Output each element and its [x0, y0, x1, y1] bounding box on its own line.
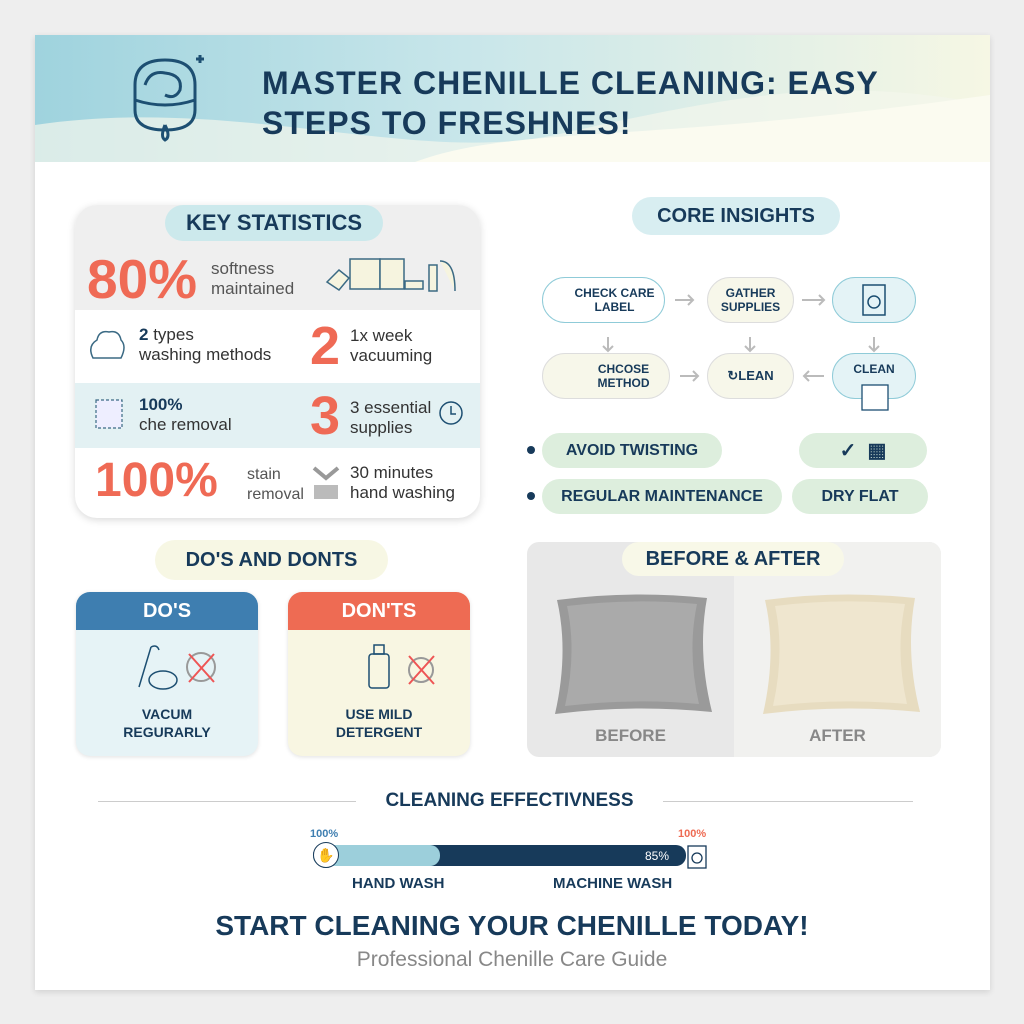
stat 80%: softness [211, 259, 274, 278]
panel: do's: VACUM [142, 706, 192, 722]
stat 30 minutes [312, 463, 455, 502]
stat 2 1x week: 2 [310, 316, 340, 376]
panel: before & after: AFTER [809, 726, 866, 745]
panel: don'ts [288, 592, 470, 756]
stat 3 essential: supplies [350, 418, 412, 437]
heading: cleaning effectiveness: CLEANING EFFECTIVNESS [385, 790, 634, 811]
bar chart: HAND WASH [352, 875, 444, 892]
flowchart: SUPPLIES [721, 300, 780, 314]
header banner [35, 35, 990, 162]
panel: don'ts: DON'TS [342, 600, 416, 622]
stat 2 types [90, 325, 271, 364]
stat 80% [87, 248, 294, 310]
stat 100% chemical: che removal [139, 415, 232, 434]
stat 80%: maintained [211, 279, 294, 298]
bar chart: 100% [310, 828, 338, 840]
stat 80%: 80% [87, 248, 197, 310]
stat 100% stain: 100% [95, 454, 218, 507]
stat 2 1x week: 1x week [350, 326, 412, 345]
footer call to action: START CLEANING YOUR CHENILLE TODAY! [215, 910, 809, 941]
image: before pillow [555, 594, 712, 714]
heading: key statistics [165, 205, 383, 241]
title [262, 65, 879, 141]
heading: core insights: CORE INSIGHTS [657, 204, 815, 226]
bar chart: MACHINE WASH [553, 875, 672, 892]
title: STEPS TO FRESHNES! [262, 105, 631, 141]
stat 2 types: washing methods [139, 345, 271, 364]
heading: key statistics: KEY STATISTICS [186, 210, 362, 235]
stat 30 minutes: 30 minutes [350, 463, 433, 482]
panel: before & after: BEFORE [595, 726, 666, 745]
panel: before & after: BEFORE & AFTER [646, 548, 820, 570]
heading: dos and donts: DO'S AND DONTS [186, 548, 357, 570]
flowchart: METHOD [598, 376, 650, 390]
tips [527, 433, 928, 514]
icon: chenille roll [134, 55, 204, 142]
bar chart: 100% [678, 828, 706, 840]
flowchart: CHECK CARE [574, 286, 654, 300]
stat 3 essential: 3 essential [350, 398, 431, 417]
heading: dos and donts [155, 540, 388, 580]
stat 100% stain: stain [247, 466, 281, 483]
tips: ✓ ▦ [840, 440, 886, 462]
stat 100% chemical: 100% [139, 395, 182, 414]
stat 100% chemical [95, 395, 232, 434]
flowchart: ↻LEAN [727, 368, 774, 383]
tips: DRY FLAT [821, 488, 899, 504]
panel: key statistics [75, 205, 480, 518]
panel: don'ts: DETERGENT [336, 724, 422, 740]
icon: supplies [326, 258, 456, 292]
flowchart: CLEAN [853, 362, 895, 376]
bar chart: 85% [645, 849, 669, 863]
footer subtitle: Professional Chenille Care Guide [357, 948, 667, 971]
image: after pillow [763, 594, 920, 714]
bar chart [310, 828, 707, 892]
flowchart: GATHER [726, 286, 775, 300]
stat 30 minutes: hand washing [350, 483, 455, 502]
stat 2 1x week: vacuuming [350, 346, 432, 365]
panel: before & after [527, 542, 941, 757]
stat 3 essential [310, 386, 463, 446]
tips: REGULAR MAINTENANCE [561, 488, 763, 504]
panel: do's [76, 592, 258, 756]
flowchart: LABEL [594, 300, 634, 314]
title: MASTER CHENILLE CLEANING: EASY [262, 65, 879, 101]
stat 100% stain [95, 454, 304, 507]
heading: core insights [632, 197, 840, 235]
flowchart: CHCOSE [598, 362, 649, 376]
stat 100% stain: removal [247, 486, 304, 503]
flowchart [542, 277, 916, 411]
bar chart: ✋ [317, 847, 335, 863]
stat 3 essential: 3 [310, 386, 340, 446]
panel: do's: REGURARLY [123, 724, 211, 740]
panel: do's: DO'S [143, 600, 191, 622]
stat 2 1x week [310, 316, 432, 376]
stat 2 types: 2 types [139, 325, 194, 344]
tips: AVOID TWISTING [566, 442, 698, 458]
panel: don'ts: USE MILD [346, 706, 412, 722]
